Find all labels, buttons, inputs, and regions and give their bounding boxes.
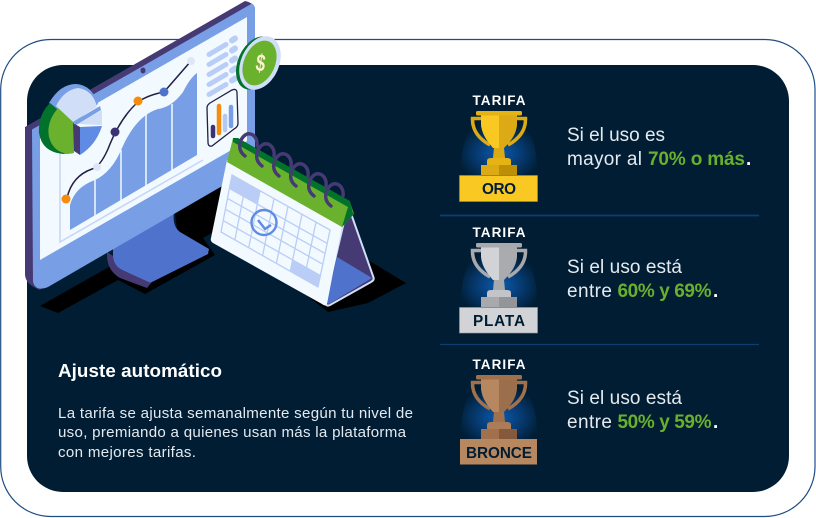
- paragraph: [58, 405, 413, 461]
- tier: oro: [460, 93, 751, 202]
- tier: bronce: [460, 357, 718, 464]
- label: TARIFA: [472, 93, 526, 108]
- mini bar chart: [207, 89, 238, 146]
- description: 60% y 69%: [618, 281, 712, 302]
- trophy: [460, 111, 538, 175]
- pie chart: [39, 84, 102, 155]
- calendar rings: [240, 134, 343, 206]
- paragraph: uso, premiando a quienes usan más la plataforma: [58, 424, 407, 441]
- dollar coin: $: [254, 50, 267, 77]
- monitor body: [25, 1, 255, 290]
- dark panel: [27, 65, 789, 492]
- calendar grid: [221, 175, 330, 287]
- text: Ajuste automático: [58, 360, 413, 461]
- illustration: monitor and calendar: [25, 1, 406, 313]
- heading: Ajuste automático: [58, 360, 222, 381]
- description: Si el uso está: [567, 388, 682, 409]
- divider: rows: [440, 214, 759, 216]
- monitor stand: [107, 212, 209, 288]
- description: [567, 257, 718, 302]
- chart area: [60, 57, 203, 242]
- shadow: [40, 187, 406, 313]
- badge: ORO: [482, 181, 516, 198]
- description: .: [746, 149, 751, 170]
- description: Si el uso está: [567, 257, 682, 278]
- description: mayor al: [567, 149, 642, 170]
- badge: PLATA: [473, 313, 525, 330]
- label: TARIFA: [472, 357, 526, 372]
- badge: [460, 439, 537, 464]
- description: 50% y 59%: [618, 412, 712, 433]
- tier: plata: [460, 225, 718, 333]
- paragraph: con mejores tarifas.: [58, 444, 196, 461]
- description: .: [713, 412, 718, 433]
- description: [567, 388, 718, 433]
- label: TARIFA: [472, 225, 526, 240]
- trophy: [460, 375, 538, 439]
- calendar check: [252, 210, 276, 235]
- badge: [460, 308, 538, 333]
- paragraph: La tarifa se ajusta semanalmente según tu nivel de: [58, 405, 413, 422]
- trophy: [460, 243, 538, 307]
- badge: BRONCE: [466, 445, 532, 462]
- description: 70% o más: [648, 149, 745, 170]
- dollar coin: [228, 30, 289, 96]
- description: .: [713, 281, 718, 302]
- list lines: [209, 38, 235, 94]
- description: Si el uso es: [567, 125, 665, 146]
- description: [567, 125, 751, 170]
- description: entre: [567, 412, 612, 433]
- description: entre: [567, 281, 612, 302]
- calendar: [211, 134, 374, 306]
- badge: [460, 176, 538, 202]
